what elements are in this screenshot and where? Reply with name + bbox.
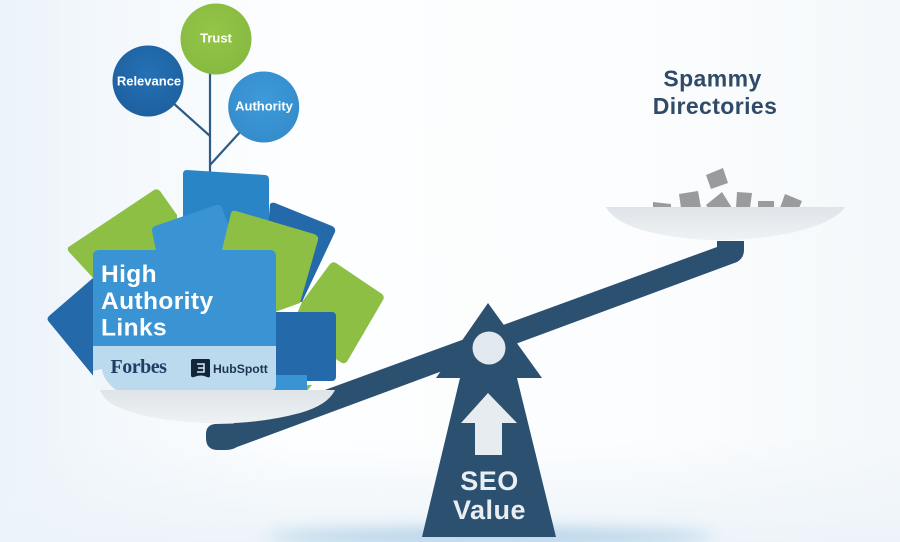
card: green sliver [300,385,312,392]
pivot [472,332,506,364]
label: SEO Value: Value [453,495,526,525]
fulcrum [422,303,556,537]
heading: Spammy Directories: Directories [653,93,777,119]
bubble: Trust: Trust [200,30,233,46]
icon: up arrow [461,393,517,455]
card: small light blue [265,375,307,391]
logo: HubSpott: HubSpott [213,362,268,376]
bubble: Trust [180,4,252,74]
heading: Authority [101,288,213,315]
bubble: Authority: Authority [235,98,294,114]
factor tree [112,4,299,172]
bubble: Relevance [112,46,184,116]
right pan [606,207,845,240]
bubble: Relevance: Relevance [117,74,181,88]
card: green left [68,189,180,280]
spam blocks [653,168,802,208]
logo: HubSpott [191,359,268,377]
card: top blue [183,170,269,260]
paper curl [93,369,116,390]
heading: High [101,261,157,288]
label: SEO Value: SEO [460,466,519,496]
heading: Spammy Directories: Spammy [663,66,762,92]
logo strip [93,346,276,390]
bubble: Authority [228,72,299,142]
card body [93,250,276,347]
connector lines [172,70,241,172]
card: green right [290,262,384,363]
card: dark blue rectangle [262,312,336,381]
floor glow [265,528,715,542]
card: blue left diamond [48,278,100,378]
lower background wash [0,440,900,542]
left pan [100,390,335,423]
card: blue middle [152,205,232,260]
card: dark blue back [262,203,335,302]
fulcrum body [422,303,556,537]
heading: Links [101,314,167,342]
beam of the scale [206,241,744,450]
stack of link cards [48,170,384,392]
logo: Forbes: Forbes [110,356,167,378]
main card: High Authority Links [93,250,276,390]
card: green middle [215,211,318,312]
